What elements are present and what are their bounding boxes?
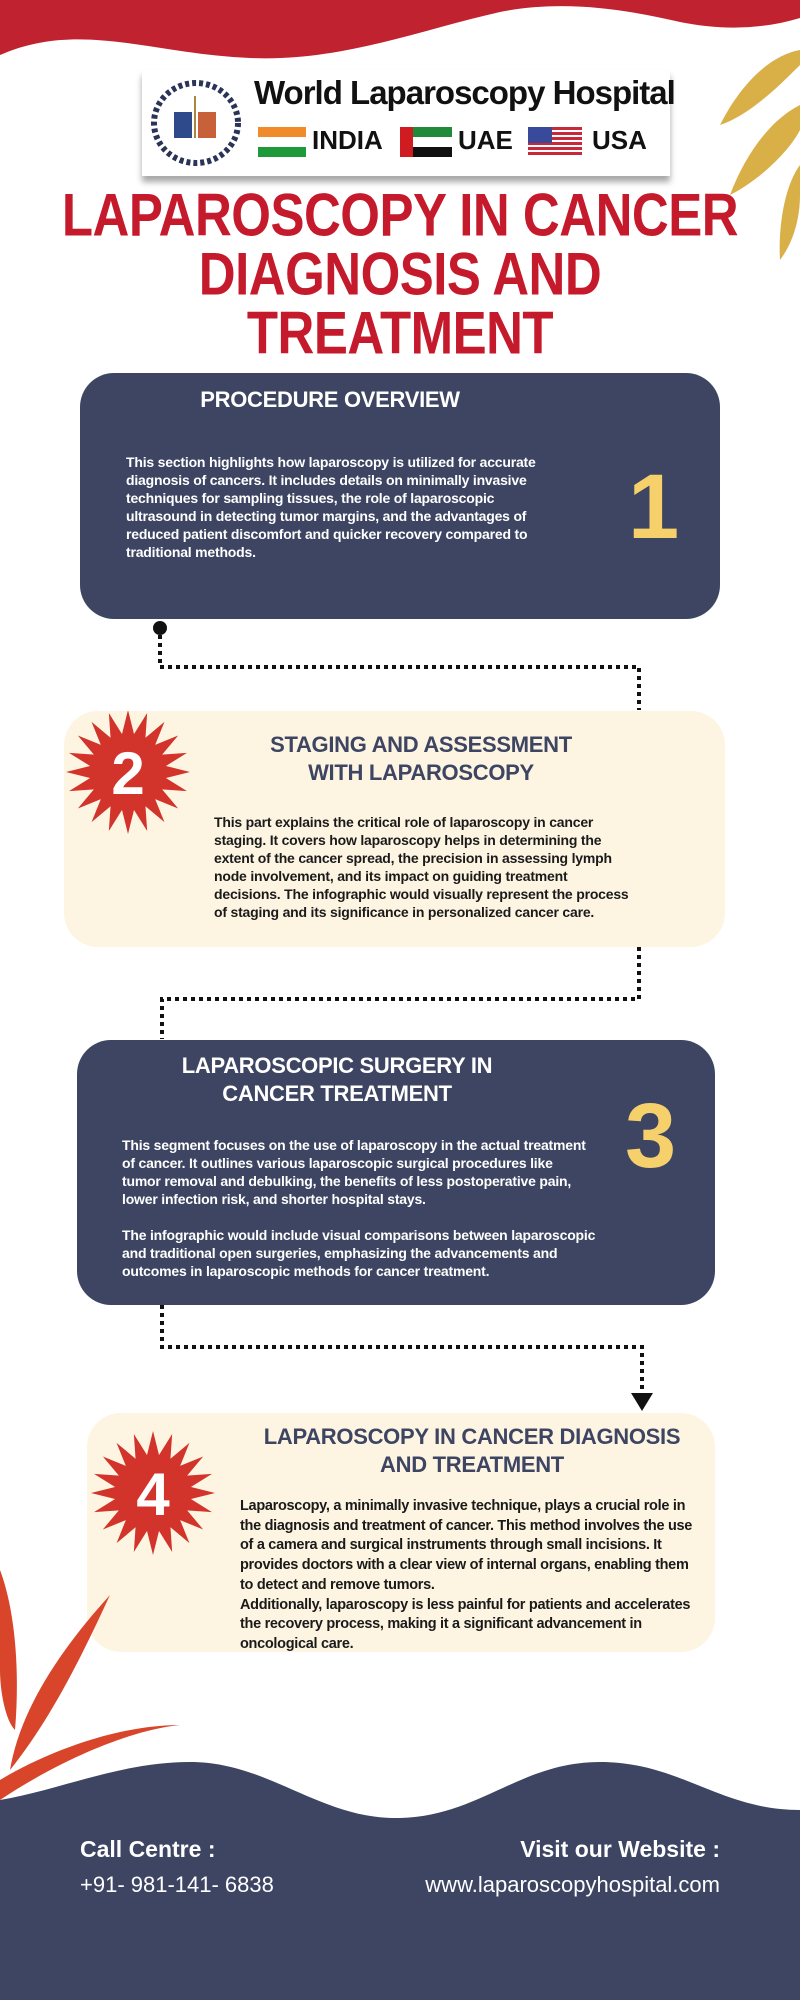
body 4: the diagnosis and treatment of cancer. This method involves the use <box>240 1518 692 1534</box>
heading 2 <box>270 732 572 785</box>
star icon 2: 2 <box>111 740 145 807</box>
body 3: and traditional open surgeries, emphasizing the advancements and <box>122 1245 557 1261</box>
body 4: the recovery process, making it a significant advancement in <box>240 1616 642 1632</box>
body 4: Additionally, laparoscopy is less painful for patients and accelerates <box>240 1597 690 1613</box>
heading 3: CANCER TREATMENT <box>222 1081 452 1106</box>
title: TREATMENT <box>247 299 553 367</box>
footer: website: Visit our Website : <box>520 1836 720 1862</box>
number 1: 1 <box>628 456 679 558</box>
body 2 <box>214 814 629 920</box>
footer: call centre: Call Centre : <box>80 1836 215 1862</box>
logo emblem <box>151 80 241 166</box>
heading 4 <box>264 1424 680 1477</box>
star icon 4 <box>91 1431 215 1555</box>
heading 4: LAPAROSCOPY IN CANCER DIAGNOSIS <box>264 1424 680 1449</box>
star icon 4: 4 <box>136 1461 170 1528</box>
flags: UAE <box>458 125 513 155</box>
logo text: World Laparoscopy Hospital <box>254 74 675 111</box>
body 4: oncological care. <box>240 1636 353 1652</box>
body 2: extent of the cancer spread, the precision in assessing lymph <box>214 850 612 866</box>
title: LAPAROSCOPY IN CANCER <box>62 181 738 249</box>
panel 1: procedure overview <box>80 373 720 619</box>
heading 3 <box>182 1053 492 1106</box>
footer: call centre: +91- 981-141- 6838 <box>80 1872 274 1897</box>
body 4: of a camera and surgical instruments through small incisions. It <box>240 1537 662 1553</box>
body 1: diagnosis of cancers. It includes details on minimally invasive <box>126 472 527 488</box>
flags <box>258 125 647 157</box>
flags: USA <box>592 125 647 155</box>
body 2: staging. It covers how laparoscopy helps in determining the <box>214 832 601 848</box>
panel 3: surgery <box>77 1040 715 1305</box>
body 4: Laparoscopy, a minimally invasive technique, plays a crucial role in <box>240 1498 685 1514</box>
flags: INDIA <box>312 125 383 155</box>
logo <box>142 70 670 176</box>
heading 1: PROCEDURE OVERVIEW <box>200 387 460 412</box>
footer: website <box>425 1836 720 1897</box>
body 3: This segment focuses on the use of laparoscopy in the actual treatment <box>122 1137 586 1153</box>
heading 2: WITH LAPAROSCOPY <box>308 760 534 785</box>
body 2: decisions. The infographic would visually represent the process <box>214 886 629 902</box>
connector 2-3 <box>160 947 641 1039</box>
body 3 <box>122 1137 595 1279</box>
number 3: 3 <box>625 1085 676 1187</box>
body 3: outcomes in laparoscopic methods for cancer treatment. <box>122 1263 489 1279</box>
body 3: of cancer. It outlines various laparoscopic surgical procedures like <box>122 1155 553 1171</box>
body 1: techniques for sampling tissues, the role of laparoscopic <box>126 490 494 506</box>
connector 1-2 <box>153 621 641 710</box>
heading 4: AND TREATMENT <box>380 1452 564 1477</box>
star icon 2 <box>66 711 190 834</box>
title <box>62 181 738 367</box>
footer: call centre <box>80 1836 274 1897</box>
body 1: reduced patient discomfort and quicker recovery compared to <box>126 526 527 542</box>
heading 3: LAPAROSCOPIC SURGERY IN <box>182 1053 492 1078</box>
body 2: This part explains the critical role of laparoscopy in cancer <box>214 814 593 830</box>
body 4 <box>240 1498 692 1652</box>
title: DIAGNOSIS AND <box>199 240 601 308</box>
body 2: of staging and its significance in personalized cancer care. <box>214 904 594 920</box>
body 1: This section highlights how laparoscopy is utilized for accurate <box>126 454 536 470</box>
body 3: lower infection risk, and shorter hospital stays. <box>122 1191 426 1207</box>
top red wave <box>0 0 800 58</box>
decoration: gold leaves <box>720 50 800 260</box>
body 1 <box>126 454 536 560</box>
panel 2: staging <box>64 711 725 947</box>
body 4: to detect and remove tumors. <box>240 1577 435 1593</box>
panel 4: diagnosis and treatment <box>87 1413 715 1652</box>
footer navy wave <box>0 1762 800 2000</box>
footer: website: www.laparoscopyhospital.com <box>425 1872 720 1897</box>
body 2: node involvement, and its impact on guiding treatment <box>214 868 567 884</box>
decoration: red leaf <box>0 1570 180 1800</box>
body 3: tumor removal and debulking, the benefits of less postoperative pain, <box>122 1173 571 1189</box>
connector 3-4 with arrow <box>160 1305 653 1411</box>
body 1: ultrasound in detecting tumor margins, and the advantages of <box>126 508 526 524</box>
body 3: The infographic would include visual comparisons between laparoscopic <box>122 1227 595 1243</box>
heading 2: STAGING AND ASSESSMENT <box>270 732 572 757</box>
body 4: provides doctors with a clear view of internal organs, enabling them <box>240 1557 689 1573</box>
body 1: traditional methods. <box>126 544 256 560</box>
